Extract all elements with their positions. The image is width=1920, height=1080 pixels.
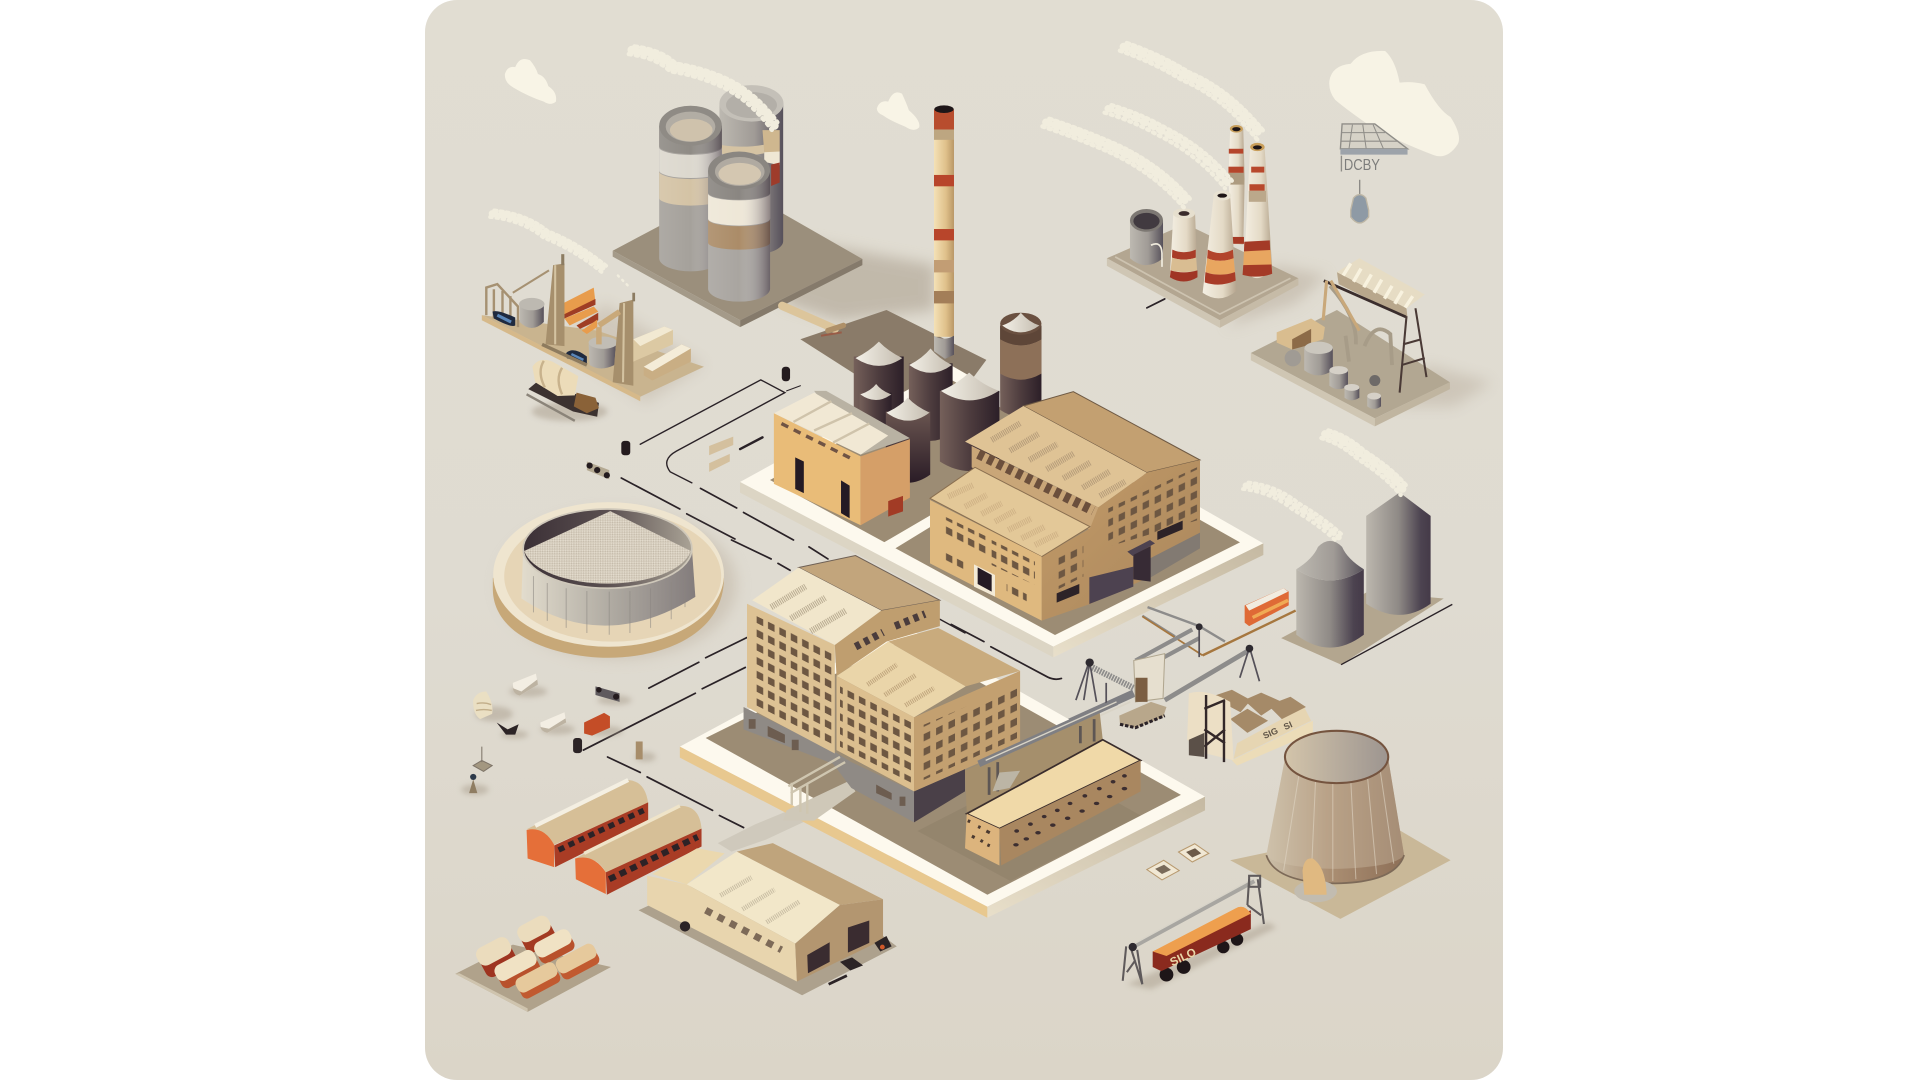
cylinder: front left — [659, 106, 722, 271]
circular storage — [493, 502, 737, 659]
bridge — [788, 757, 845, 814]
small markers upper — [587, 367, 790, 479]
tank beside — [1294, 880, 1337, 902]
conveyor tags — [493, 311, 515, 326]
base — [482, 315, 704, 397]
lower main building — [680, 555, 1205, 918]
dark windows — [1057, 521, 1183, 603]
shadow — [1227, 265, 1327, 327]
hangar front — [575, 806, 702, 895]
ribs — [533, 574, 685, 635]
mid stack — [1203, 191, 1236, 298]
silo group — [613, 85, 935, 327]
base — [934, 336, 954, 359]
scene: upper right — [1042, 43, 1492, 426]
tower left — [546, 263, 564, 346]
vehicles — [840, 936, 892, 970]
rim — [1285, 731, 1388, 783]
small tanks — [1285, 342, 1381, 409]
front silo — [1296, 569, 1364, 648]
silo E — [940, 373, 999, 471]
roofed frame — [1323, 258, 1426, 393]
small shed — [774, 391, 910, 525]
shed text: SIG — [1261, 725, 1280, 741]
measure line — [1341, 604, 1452, 665]
wagon label: SILO — [1168, 946, 1198, 969]
trailer — [527, 394, 575, 421]
gate — [1089, 567, 1133, 604]
connector path — [783, 781, 855, 821]
silo D — [886, 398, 930, 483]
large cloud — [1329, 51, 1459, 156]
block — [513, 674, 538, 696]
roofs — [965, 392, 1200, 533]
connecting pipe — [782, 306, 843, 336]
inner wall — [523, 509, 692, 588]
left wall — [774, 413, 861, 525]
ground apron — [639, 850, 897, 995]
tank — [1130, 209, 1163, 267]
shadows — [461, 686, 656, 795]
doorway — [974, 564, 995, 597]
legs — [1123, 879, 1264, 984]
icon: probe — [1351, 180, 1369, 223]
crate — [1277, 319, 1325, 350]
cab — [574, 393, 599, 413]
smoke: silo plumes — [1243, 430, 1408, 541]
panel: background — [425, 0, 1503, 1080]
hangar back — [527, 780, 648, 867]
ribs — [1284, 769, 1394, 881]
back stack — [1228, 125, 1245, 245]
shadow — [1395, 365, 1492, 406]
conveyor in front of main block — [965, 702, 1117, 812]
back roof — [737, 843, 883, 905]
dark ground slab — [800, 310, 986, 406]
drum wall — [521, 549, 695, 626]
gravel heap — [524, 511, 691, 584]
pipework — [1330, 286, 1392, 365]
smoke: rig plume — [490, 210, 628, 286]
roof — [967, 740, 1141, 829]
right wall — [861, 439, 910, 525]
sack: front right — [554, 942, 602, 982]
lower block — [837, 628, 1020, 791]
shed cluster — [1187, 690, 1313, 766]
doors — [795, 457, 850, 518]
tank right — [589, 341, 616, 368]
sack: left — [473, 934, 520, 980]
plate — [1281, 592, 1444, 665]
upper main building — [930, 392, 1200, 621]
icon: cloud centre — [877, 92, 919, 130]
sack: front — [513, 960, 563, 1001]
boom — [1134, 881, 1254, 946]
dark items — [497, 723, 519, 735]
disc top — [493, 502, 724, 647]
curve line — [951, 624, 1061, 679]
wall — [647, 876, 797, 982]
roof vents — [992, 423, 1125, 496]
disc rim — [493, 578, 724, 658]
smoke: silo plume — [629, 46, 777, 130]
left wall — [965, 814, 999, 865]
base — [1251, 310, 1450, 418]
post — [469, 779, 477, 793]
ground shadow — [563, 303, 704, 403]
scene: right side — [986, 492, 1452, 989]
sack: back — [515, 913, 559, 955]
long low building — [951, 624, 1141, 865]
silo F — [1000, 313, 1041, 417]
tall stack — [1243, 143, 1272, 278]
shadow — [532, 402, 608, 421]
plate — [613, 186, 862, 320]
shadow — [783, 241, 935, 320]
smoke: stack plumes — [1042, 43, 1265, 207]
sack: centre right — [532, 927, 577, 966]
grey base — [744, 707, 965, 822]
processing platform — [1251, 258, 1492, 426]
warehouse — [639, 791, 897, 995]
marker — [1147, 299, 1165, 308]
canister — [595, 686, 620, 702]
scene: upper half — [482, 46, 986, 540]
cooling tower — [1230, 731, 1451, 919]
clouds: upper left — [505, 59, 919, 130]
gable — [795, 899, 883, 982]
truck — [527, 360, 608, 421]
lower roof — [930, 467, 1090, 557]
silo pair — [1281, 492, 1452, 665]
shell — [1266, 757, 1404, 883]
silo C — [860, 384, 892, 427]
body — [1153, 910, 1251, 971]
cream boxes — [633, 326, 673, 362]
hatches — [1147, 844, 1209, 880]
column — [934, 110, 954, 337]
scene: left lower — [455, 502, 965, 1012]
upper block — [747, 555, 940, 754]
front roof — [687, 852, 840, 944]
hopper — [1119, 654, 1166, 728]
lower roof vents — [948, 485, 1058, 545]
mouth — [934, 105, 954, 113]
red wagon — [1203, 588, 1296, 655]
upper plate — [740, 366, 1263, 657]
windows — [1013, 774, 1127, 847]
tower right — [613, 300, 633, 386]
back roof — [814, 391, 910, 455]
right wall — [1042, 460, 1200, 621]
process lines lower — [583, 540, 965, 828]
sack — [473, 692, 492, 719]
icon: solar panel with label — [1340, 124, 1408, 174]
rig platform — [482, 254, 704, 403]
process lines upper — [621, 380, 800, 540]
icon: solar panel with label: DCBY — [1344, 157, 1380, 174]
rail wagon with conveyor — [1123, 876, 1277, 989]
tank load — [532, 360, 578, 396]
shed cluster: SI — [1282, 719, 1294, 732]
sack stack — [455, 913, 611, 1012]
right wall — [999, 760, 1141, 865]
icon: cloud left — [505, 59, 556, 104]
left wall — [930, 500, 1042, 621]
gantry left — [486, 270, 549, 327]
conveyor system — [986, 607, 1259, 766]
pallet — [455, 945, 611, 1012]
side shed — [652, 848, 725, 884]
sack: centre — [492, 947, 543, 991]
front roof — [774, 393, 888, 455]
shadow — [499, 511, 737, 659]
shadow connector — [718, 791, 852, 852]
cylinder: front right — [708, 152, 770, 302]
grey base — [1150, 533, 1200, 577]
small field objects — [461, 674, 656, 795]
silo B — [909, 349, 953, 441]
cone marker — [473, 747, 492, 771]
clerestory — [972, 446, 1098, 533]
base — [1107, 224, 1298, 320]
plate — [1230, 826, 1451, 919]
hangars — [527, 780, 702, 895]
wheels — [1160, 933, 1243, 982]
stripes — [934, 110, 954, 303]
shadow — [1127, 922, 1277, 989]
plate — [680, 626, 1205, 918]
orange crates — [563, 288, 595, 315]
short stack — [1170, 208, 1197, 282]
front shed curb — [917, 764, 1141, 881]
chimney and dark silos — [854, 105, 1041, 483]
tank left — [520, 303, 544, 328]
cylinder: back — [708, 85, 784, 255]
chimney — [934, 105, 954, 359]
stack platform — [1107, 125, 1327, 328]
block — [540, 712, 566, 733]
back silo — [1366, 492, 1431, 615]
silo A — [854, 342, 904, 420]
orange drum — [584, 713, 610, 736]
roller doors — [807, 921, 869, 973]
